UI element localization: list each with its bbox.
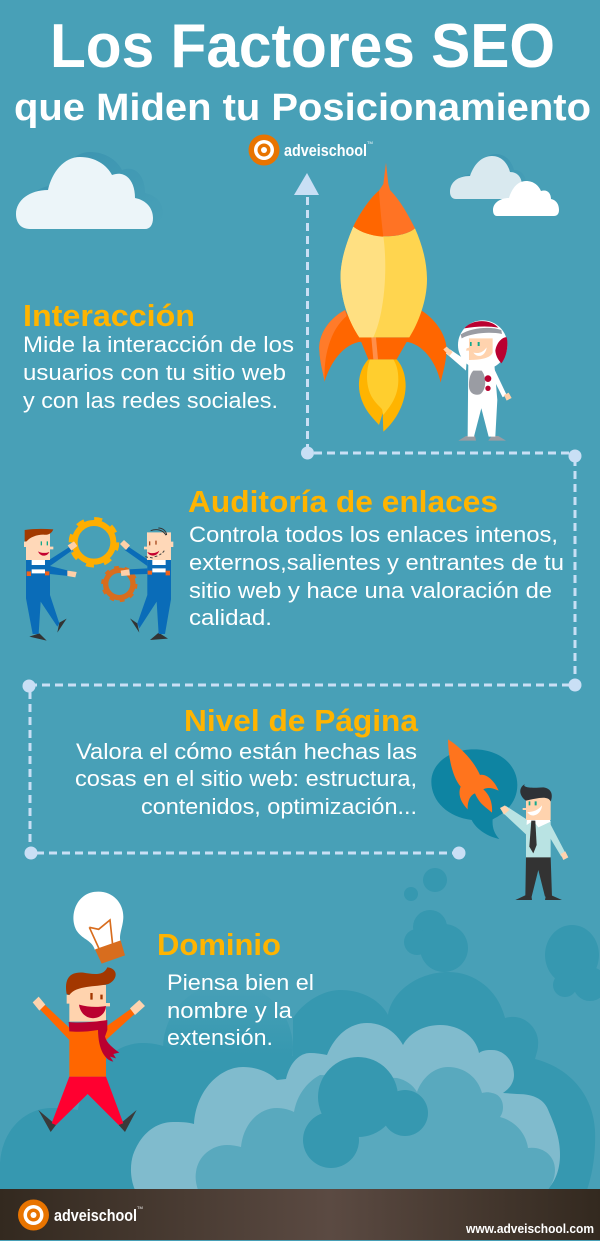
text: Nivel de Página description	[75, 739, 417, 819]
text: Dominio description	[167, 970, 314, 1050]
heading: Auditoría de enlaces: Auditoría de enlaces	[188, 484, 498, 519]
text: Dominio description: Piensa bien el	[167, 970, 314, 995]
title: Los Factores SEO	[50, 12, 555, 81]
icon: two workers with gears	[24, 519, 173, 641]
logo top: adveischool	[284, 141, 367, 160]
text: Interacción description: usuarios con tu sitio web	[23, 360, 286, 385]
icon: astronaut	[443, 320, 512, 441]
heading: Dominio: Dominio	[157, 927, 281, 962]
text: Auditoría description: sitio web y hace una valoración de	[189, 578, 552, 603]
heading: Nivel de Página: Nivel de Página	[184, 703, 419, 738]
light foreground cloud	[131, 1023, 560, 1190]
footer bar	[0, 1189, 600, 1240]
title	[14, 12, 591, 129]
text: Auditoría description: externos,salientes y entrantes de tu	[189, 550, 564, 575]
text: Dominio description: extensión.	[167, 1025, 273, 1050]
heading: Interacción: Interacción	[23, 298, 195, 333]
text: Dominio description: nombre y la	[167, 998, 293, 1023]
dark cloud puffs in front	[303, 1057, 428, 1168]
text: Interacción description	[23, 332, 294, 413]
small clouds top right	[450, 154, 559, 216]
text: Auditoría description: Controla todos los enlaces intenos,	[189, 522, 558, 547]
text: Nivel de Página description: cosas en el sitio web: estructura,	[75, 766, 417, 791]
icon: speech bubble with rocket	[431, 739, 517, 839]
text: Nivel de Página description: Valora el cómo están hechas las	[76, 739, 417, 764]
text: Interacción description: y con las redes sociales.	[23, 388, 278, 413]
text: Auditoría description: calidad.	[189, 605, 272, 630]
logo top: TM	[367, 140, 373, 145]
footer bar: TM	[137, 1205, 143, 1210]
text: Auditoría description	[189, 522, 564, 630]
footer bar: adveischool	[54, 1206, 137, 1225]
dashed path with arrow	[22, 173, 582, 860]
icon: rocket	[319, 163, 447, 432]
mid-tone cloud	[196, 1067, 555, 1190]
background cloud puffs upper right	[404, 868, 600, 1001]
icon: jumping man	[33, 967, 145, 1132]
icon: businessman	[500, 784, 568, 900]
large dark cloud	[0, 972, 595, 1190]
title: que Miden tu Posicionamiento	[14, 87, 591, 129]
logo top	[248, 134, 373, 166]
faded cloud hump	[163, 983, 293, 1113]
text: Interacción description: Mide la interacción de los	[23, 332, 294, 357]
text: Nivel de Página description: contenidos, optimización...	[141, 794, 417, 819]
icon: light bulb	[73, 892, 125, 964]
large cloud top left	[16, 152, 163, 229]
